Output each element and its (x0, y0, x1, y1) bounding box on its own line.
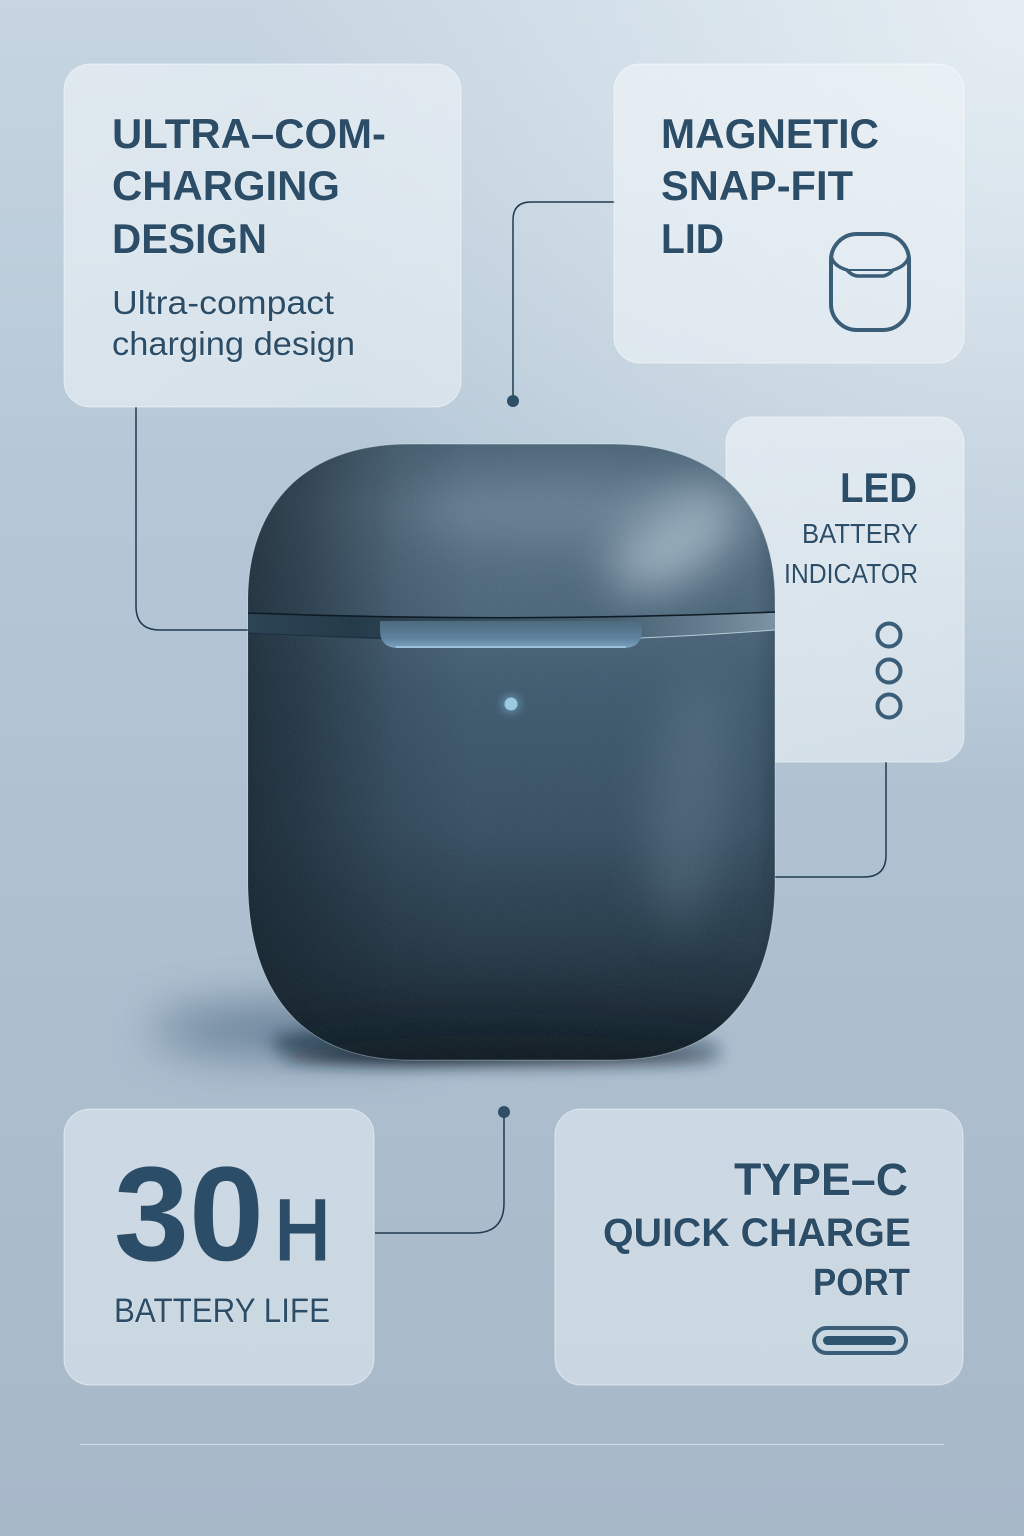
card (614, 64, 964, 363)
connector: compact design to case seam (136, 407, 250, 630)
lid notch (380, 621, 642, 648)
heading (603, 1154, 911, 1304)
description: charging design (112, 325, 355, 362)
seam band (248, 612, 775, 641)
heading: CHARGING (112, 162, 340, 209)
heading: LID (661, 215, 724, 262)
heading: LED (840, 464, 917, 511)
heading: SNAP-FIT (661, 162, 853, 209)
description: Ultra-compact (112, 284, 334, 321)
panel: LED battery indicator (726, 417, 964, 762)
description: BATTERY (802, 518, 918, 549)
charging case (248, 444, 776, 1060)
card (64, 1109, 374, 1385)
connector: battery life with end dot (375, 1106, 510, 1233)
footer divider (80, 1444, 944, 1445)
panel: 30H battery life (64, 1109, 374, 1385)
LED light (501, 694, 521, 714)
ground shadow (150, 1006, 722, 1065)
heading: ULTRA–COM- (112, 110, 386, 157)
panel: ultra-compact charging design (64, 64, 461, 407)
unit: H (275, 1183, 330, 1277)
icon: case outline (831, 234, 909, 330)
label: BATTERY LIFE (114, 1292, 330, 1330)
heading: QUICK CHARGE (603, 1211, 911, 1255)
connector: magnetic lid with end dot (507, 202, 615, 407)
card (726, 417, 964, 762)
description (112, 284, 355, 362)
icon: USB-C port (814, 1328, 906, 1353)
panel: magnetic snap-fit lid (614, 64, 964, 363)
icon: three battery LEDs (878, 624, 900, 718)
case body (248, 444, 775, 1060)
heading: PORT (813, 1262, 910, 1304)
heading: TYPE–C (734, 1154, 908, 1205)
connector: LED panel to case (774, 762, 886, 877)
description: INDICATOR (784, 558, 918, 589)
panel: Type-C quick charge port (555, 1109, 963, 1385)
heading: DESIGN (112, 215, 267, 262)
description (784, 518, 918, 589)
heading (661, 110, 879, 262)
heading: MAGNETIC (661, 110, 879, 157)
big number: 30 (114, 1140, 264, 1289)
heading (112, 110, 386, 262)
card (64, 64, 461, 407)
card (555, 1109, 963, 1385)
